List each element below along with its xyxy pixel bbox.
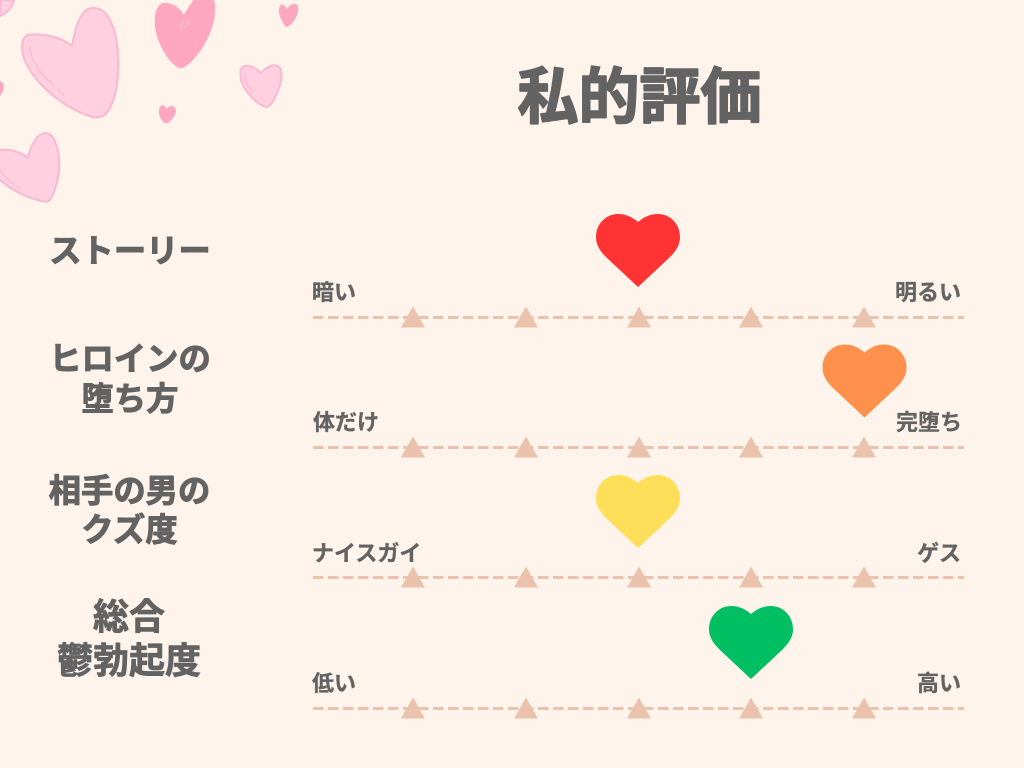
scale: 相手の男のクズ度 [313, 566, 964, 588]
left end label: 暗い: 暗い [312, 280, 356, 305]
label: 総合鬱勃起度: 鬱勃起度 [57, 640, 201, 681]
right end label: 完堕ち: 完堕ち [896, 410, 962, 435]
right end label: ゲス: ゲス [917, 541, 961, 566]
scale: ヒロインの堕ち方 [313, 436, 964, 458]
scale: ストーリー [313, 306, 964, 328]
decorative pink hearts [0, 0, 298, 202]
row: 総合鬱勃起度 [57, 596, 964, 718]
heart marker: red [596, 214, 680, 287]
left end label: 低い: 低い [312, 671, 356, 696]
scale: 総合鬱勃起度 [313, 698, 964, 718]
left end label: ナイスガイ: ナイスガイ [312, 541, 421, 566]
row: ヒロインの堕ち方 [49, 341, 964, 458]
label: 相手の男のクズ度: クズ度 [81, 512, 178, 548]
label: ストーリー: ストーリー [49, 233, 211, 269]
heart marker: green [709, 606, 793, 679]
label: 総合鬱勃起度: 総合 [93, 596, 165, 637]
right end label: 明るい: 明るい [895, 280, 961, 305]
label: ヒロインの堕ち方: 堕ち方 [82, 381, 178, 417]
left end label: 体だけ: 体だけ [313, 410, 379, 435]
title: 私的評価 [517, 63, 762, 131]
row: ストーリー [49, 214, 964, 328]
right end label: 高い: 高い [917, 671, 961, 696]
label: ヒロインの堕ち方: ヒロインの [49, 341, 211, 377]
label: 相手の男のクズ度: 相手の男の [49, 473, 210, 509]
heart marker: orange [822, 344, 906, 418]
heart marker: yellow [596, 475, 680, 548]
row: 相手の男のクズ度 [49, 473, 964, 588]
